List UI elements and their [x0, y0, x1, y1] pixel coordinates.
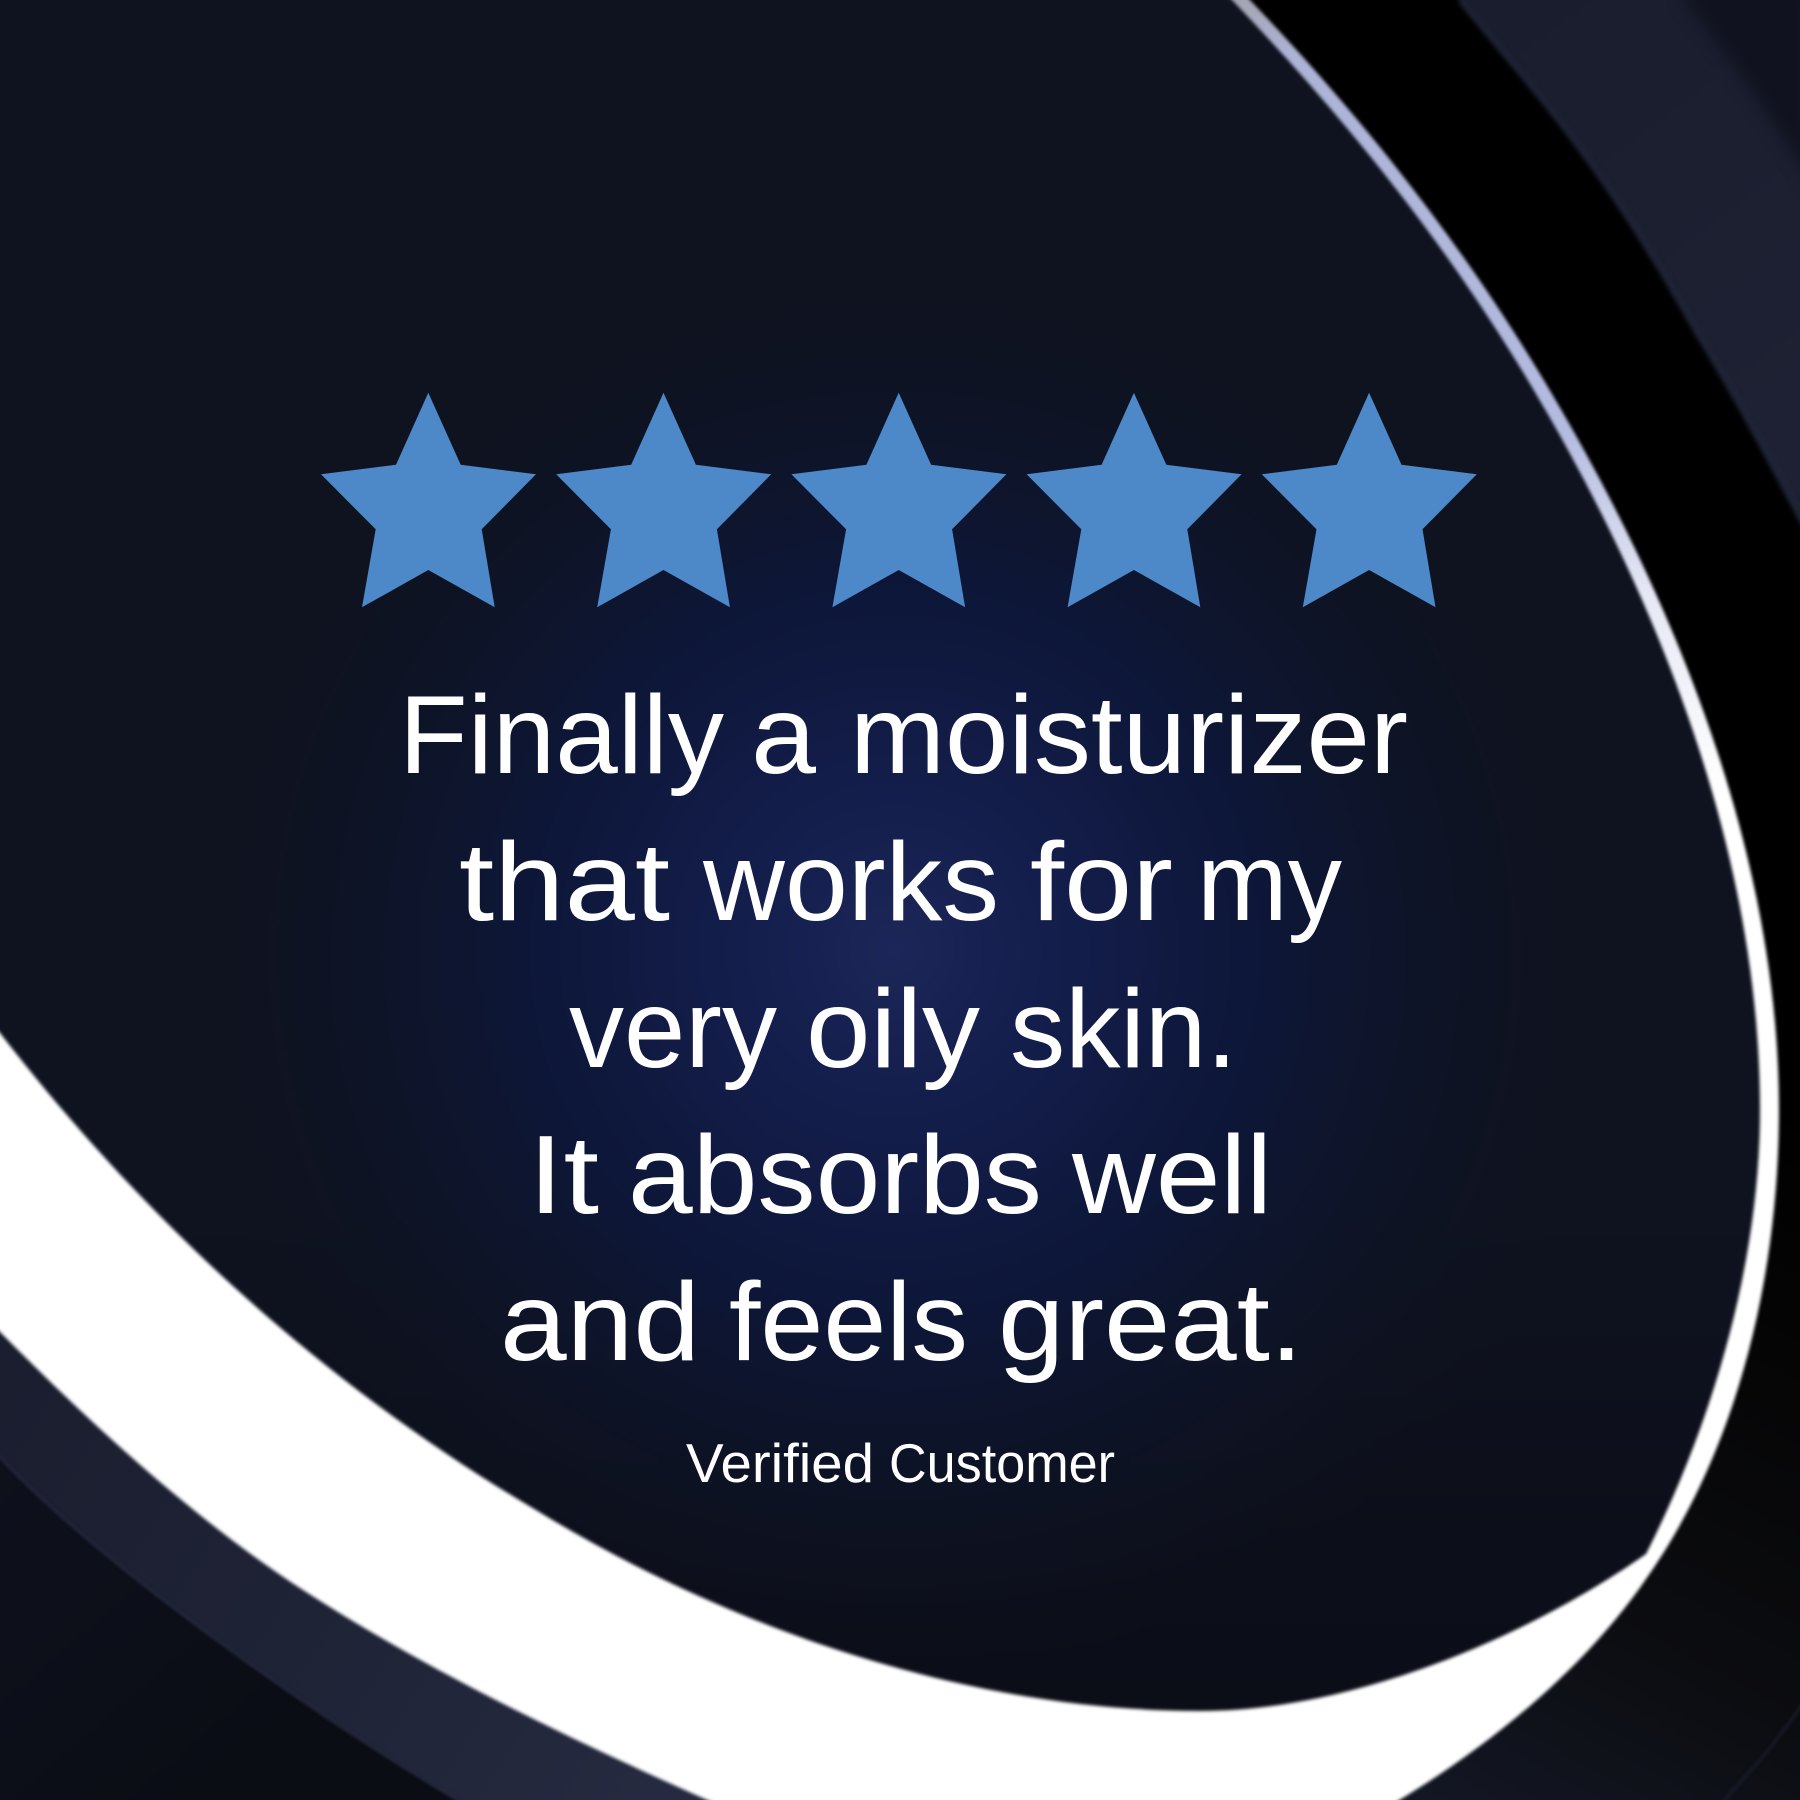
quote line 1	[399, 673, 1408, 797]
review quote	[399, 673, 1408, 1384]
quote line 5: feels	[729, 1260, 968, 1384]
star 4	[1027, 393, 1242, 607]
quote line 1: Finally	[399, 673, 724, 797]
quote line 4: It	[528, 1113, 599, 1237]
quote line 4	[528, 1113, 1272, 1237]
quote line 3: very	[569, 967, 777, 1091]
quote line 5	[500, 1260, 1303, 1384]
quote line 2: my	[1197, 820, 1342, 944]
star 2	[556, 393, 771, 607]
quote line 2: works	[702, 820, 999, 944]
star 3	[791, 393, 1006, 607]
top right navy band	[1450, 0, 1800, 540]
lower left navy band	[0, 1300, 800, 1800]
quote line 1: moisturizer	[850, 673, 1408, 797]
quote line 4: well	[1071, 1113, 1272, 1237]
lower right thin arc	[1722, 1699, 1800, 1800]
star 5	[1262, 393, 1477, 607]
quote line 5: great.	[998, 1260, 1303, 1384]
quote line 1: a	[751, 673, 816, 797]
quote line 2: that	[459, 820, 670, 944]
attribution: Customer	[889, 1432, 1115, 1494]
attribution: Verified	[686, 1432, 874, 1494]
quote line 3: skin.	[1010, 967, 1237, 1091]
quote line 3: oily	[806, 967, 981, 1091]
quote line 5: and	[500, 1260, 700, 1384]
quote line 2	[459, 820, 1342, 944]
star 1	[321, 393, 536, 607]
quote line 3	[569, 967, 1237, 1091]
quote line 4: absorbs	[628, 1113, 1042, 1237]
five star rating	[321, 393, 1477, 607]
quote line 2: for	[1030, 820, 1173, 944]
attribution	[686, 1432, 1115, 1494]
